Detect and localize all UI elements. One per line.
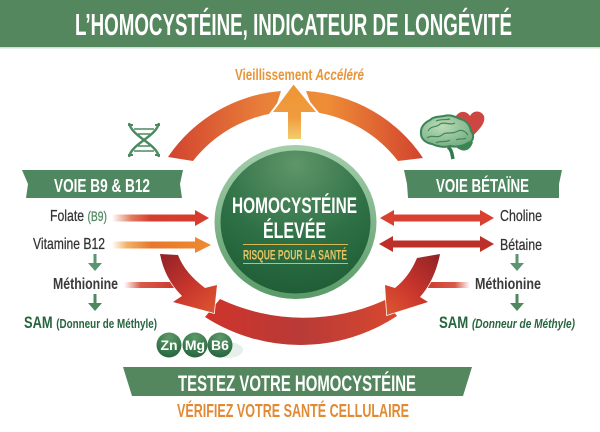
bottom arc xyxy=(205,299,397,345)
banner: testez votre homocystéine xyxy=(123,367,472,396)
banner: voie b9 b12 xyxy=(22,170,183,198)
swoosh arrow right xyxy=(385,254,440,315)
label: sam right: SAM (Donneur de Méthyle) xyxy=(439,313,575,332)
arrow: bétaïne to méthionine xyxy=(510,254,524,271)
icon: heart and brain xyxy=(421,112,484,159)
label: vitamine b12: Vitamine B12 xyxy=(33,236,105,253)
cofactor badges xyxy=(156,332,243,358)
risk tagline: RISQUE POUR LA SANTÉ xyxy=(243,246,347,262)
arrow: folate xyxy=(112,210,209,226)
label: méthionine left: Méthionine xyxy=(53,276,118,293)
label: méthionine right: Méthionine xyxy=(475,276,541,293)
arrow: bétaïne xyxy=(379,236,494,252)
title banner xyxy=(0,0,600,48)
label: sam left: SAM (Donneur de Méthyle) xyxy=(24,313,157,332)
icon: dna xyxy=(128,123,160,157)
swoosh arrow left xyxy=(160,254,217,313)
top arc arrows xyxy=(168,91,423,161)
circle heading: HOMOCYSTÉINE xyxy=(232,193,357,218)
call to action subtitle: VÉRIFIEZ VOTRE SANTÉ CELLULAIRE xyxy=(177,400,409,421)
badge: zn: Zn xyxy=(160,337,178,353)
arrow: méthionine to sam right xyxy=(510,294,524,311)
arrow: vitamine b12 xyxy=(112,237,211,253)
badge: mg: Mg xyxy=(185,337,205,353)
up arrow xyxy=(271,83,318,140)
label: choline: Choline xyxy=(500,208,542,225)
label: bétaïne: Bétaine xyxy=(500,237,542,254)
label: vieillissement accéléré: Vieillissement Accéléré xyxy=(235,67,364,84)
label: folate: Folate (B9) xyxy=(50,208,107,225)
banner: testez votre homocystéine: TESTEZ VOTRE HOMOCYSTÉINE xyxy=(178,371,416,396)
banner: voie bétaïne: VOIE BÉTAÏNE xyxy=(436,175,529,196)
arrow: b12 to méthionine xyxy=(88,254,102,271)
banner: voie bétaïne xyxy=(404,170,562,198)
bar: méthionine left xyxy=(124,282,180,288)
risk tagline xyxy=(243,244,348,264)
central circle xyxy=(214,145,376,299)
arrow: choline xyxy=(380,210,494,226)
badge: b6: B6 xyxy=(211,337,229,353)
bar: méthionine right xyxy=(420,282,470,288)
circle subheading: ÉLEVÉE xyxy=(263,218,326,243)
banner: voie b9 b12: VOIE B9 & B12 xyxy=(54,175,150,196)
arrow: méthionine to sam left xyxy=(88,294,102,311)
